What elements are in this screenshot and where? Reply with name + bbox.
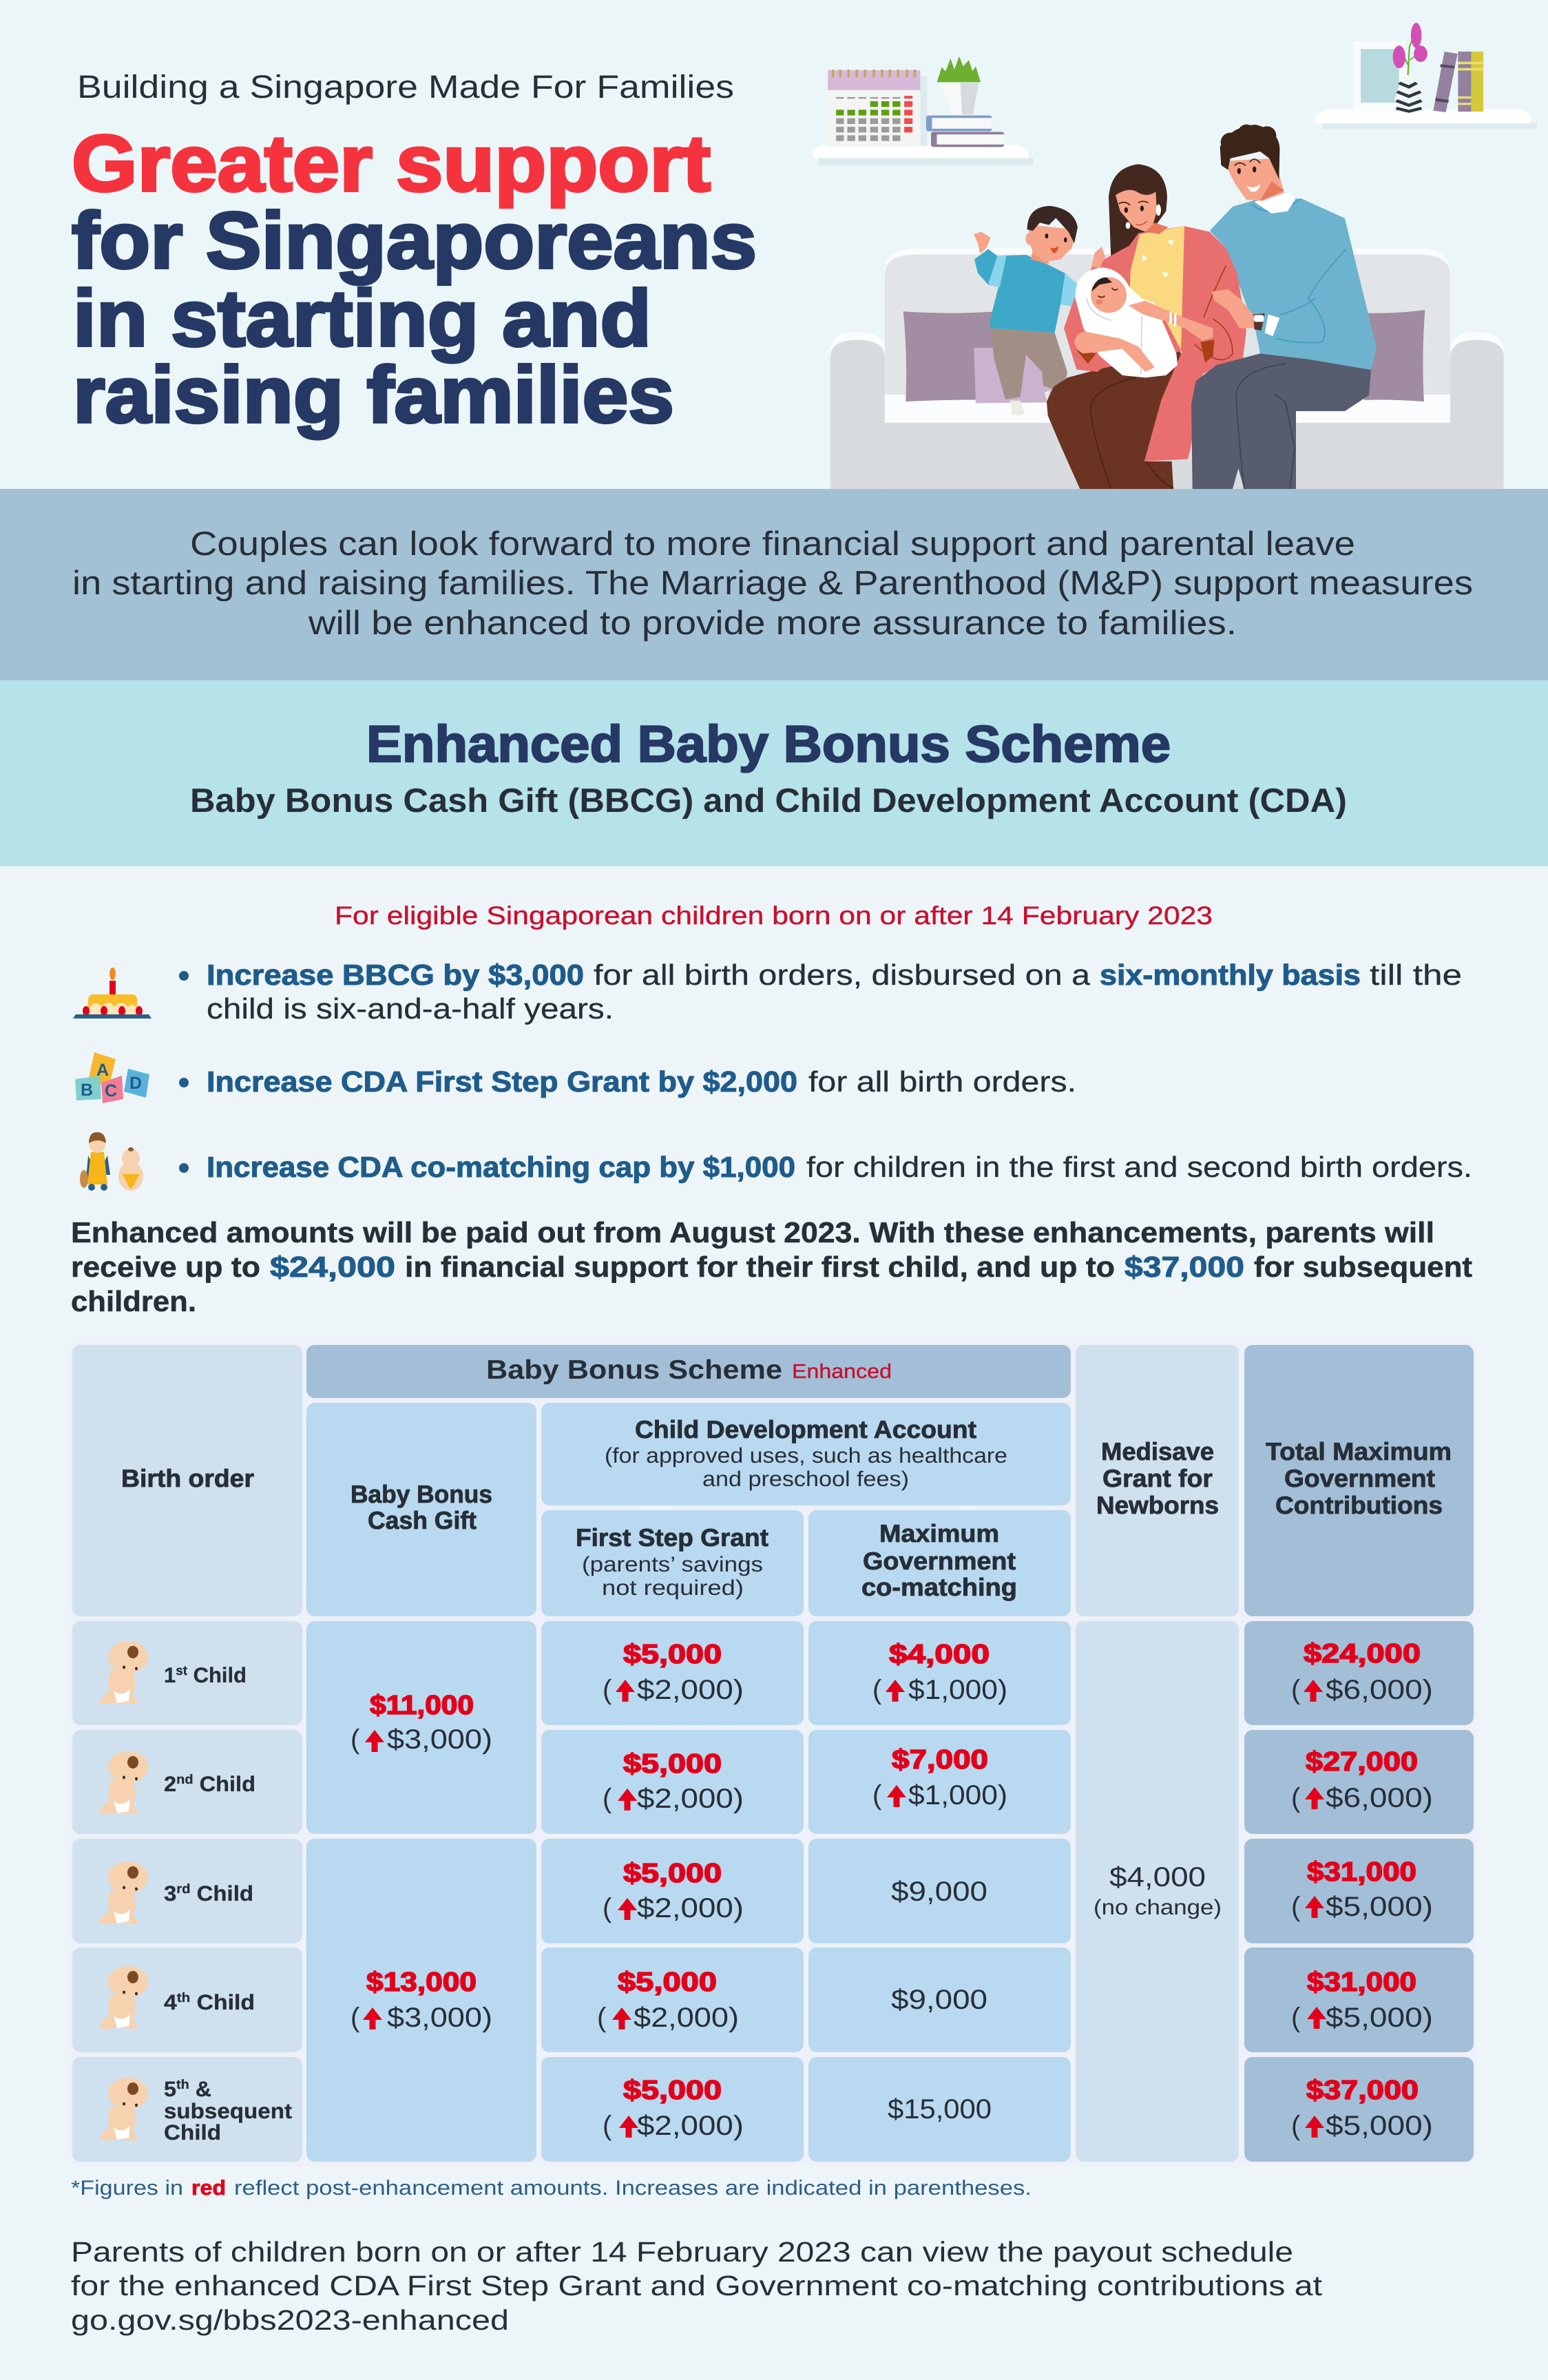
header: Medisave Grant for Newborns: Newborns xyxy=(1096,1491,1219,1519)
closing text: payout schedule: Parents of children born on or after 14 February 2023 can view the payout schedule xyxy=(71,2236,1293,2268)
icon: alphabet blocks: D xyxy=(129,1074,142,1093)
cell: total 2nd child: $6,000) xyxy=(1326,1783,1433,1813)
header: Total Maximum Government Contributions: Government xyxy=(1284,1464,1435,1492)
bullet 3: for children in the first and second birth orders. xyxy=(806,1151,1472,1183)
header: First Step Grant: not required) xyxy=(602,1576,744,1600)
bullet 2: Increase CDA First Step Grant by $2,000 xyxy=(207,1065,797,1098)
cell: Baby Bonus Cash Gift 1st and 2nd child: ( xyxy=(351,1724,360,1755)
cell: total 2nd child: ( xyxy=(1291,1783,1301,1813)
icon: father arm and legs xyxy=(1191,289,1371,489)
text block: enhanced amounts: receive up to xyxy=(71,1251,260,1283)
cell: total 5th child xyxy=(1244,2057,1474,2162)
band: intro: Couples can look forward to more financial support and parental leave xyxy=(190,525,1355,563)
cell: total 3rd child: $31,000 xyxy=(1307,1857,1416,1887)
main title: in starting and xyxy=(73,273,651,363)
cell: Baby Bonus Cash Gift 1st and 2nd child: $11,000 xyxy=(370,1691,474,1720)
cell: co-matching 2nd child: $7,000 xyxy=(892,1745,988,1775)
cell: First Step Grant 4th child xyxy=(541,1948,804,2052)
row label: 2nd Child: nd xyxy=(176,1773,193,1787)
cell: co-matching 1st child xyxy=(808,1621,1071,1725)
cell: total 1st child: $24,000 xyxy=(1304,1639,1421,1669)
cell: Baby Bonus Cash Gift 3rd to 5th child: $13,000 xyxy=(366,1967,477,1997)
cell: co-matching 5th child xyxy=(808,2057,1071,2162)
cell: total 1st child: ( xyxy=(1291,1675,1301,1705)
cell: co-matching 2nd child: ( xyxy=(872,1780,882,1810)
bullet 1: Increase BBCG by $3,000 xyxy=(207,959,584,991)
icon: birthday cake xyxy=(73,968,151,1019)
row label: 4th Child: Child xyxy=(190,1990,255,2014)
text block: enhanced amounts: children. xyxy=(71,1285,196,1317)
bullet 3: Increase CDA co-matching cap by $1,000 xyxy=(207,1151,795,1183)
closing text: payout schedule: go.gov.sg/bbs2023-enhanced xyxy=(71,2304,509,2336)
cell: First Step Grant 1st child: $5,000 xyxy=(623,1640,722,1669)
cell: First Step Grant 1st child: $2,000) xyxy=(637,1675,744,1705)
row label: 2nd Child: Child xyxy=(193,1772,255,1796)
row label: 3rd Child: Child xyxy=(191,1881,253,1906)
cell: total 1st child: $6,000) xyxy=(1326,1675,1433,1705)
row label: 5th and subsequent Child xyxy=(72,2057,302,2162)
cell: co-matching 2nd child: $1,000) xyxy=(908,1780,1007,1810)
cell: First Step Grant 4th child: ( xyxy=(597,2003,607,2033)
band: scheme heading xyxy=(0,680,1548,866)
header: First Step Grant: First Step Grant xyxy=(576,1523,768,1552)
footnote: red xyxy=(191,2177,226,2200)
text block: enhanced amounts: Enhanced amounts will be paid out from August 2023. With these enhancements, parents will xyxy=(71,1216,1434,1249)
cell: First Step Grant 5th child: $2,000) xyxy=(637,2111,744,2141)
header: Baby Bonus Scheme Enhanced: Enhanced xyxy=(792,1361,892,1383)
cell: total 4th child: ( xyxy=(1291,2003,1301,2033)
row label: 5th and subsequent Child: subsequent xyxy=(164,2099,292,2123)
header: Total Maximum Government Contributions xyxy=(1244,1345,1474,1616)
cell: co-matching 1st child: $1,000) xyxy=(908,1675,1007,1705)
row label: 5th and subsequent Child: & xyxy=(189,2077,211,2101)
header: Maximum Government co-matching: Government xyxy=(863,1547,1016,1575)
bullet 1: six-monthly basis xyxy=(1100,959,1361,991)
header: Baby Bonus Cash Gift xyxy=(306,1403,536,1616)
main title: for Singaporeans xyxy=(72,196,757,285)
cell: Medisave Grant: $4,000 xyxy=(1109,1862,1206,1892)
row label: 3rd Child: rd xyxy=(176,1882,191,1897)
row label: 2nd Child: 2 xyxy=(164,1772,176,1796)
band: intro: will be enhanced to provide more assurance to families. xyxy=(308,605,1237,642)
band: scheme heading: Enhanced Baby Bonus Scheme xyxy=(366,715,1171,773)
table: Baby Bonus Scheme xyxy=(69,1342,1477,2165)
header: Baby Bonus Scheme Enhanced: Baby Bonus Scheme xyxy=(486,1355,782,1385)
illustration: family xyxy=(974,125,1377,489)
cell: First Step Grant 4th child: $2,000) xyxy=(634,2003,739,2033)
cell: co-matching 4th child: $9,000 xyxy=(891,1985,987,2015)
icon: toddler xyxy=(974,206,1078,415)
cell: total 4th child xyxy=(1244,1948,1474,2052)
closing text: payout schedule: for the enhanced CDA First Step Grant and Government co-matching contributions at xyxy=(71,2270,1323,2301)
main title: raising families xyxy=(73,350,674,439)
icon: alphabet blocks xyxy=(75,1052,149,1103)
cell: total 4th child: $31,000 xyxy=(1307,1967,1416,1997)
text block: enhanced amounts: $37,000 xyxy=(1125,1251,1244,1283)
header: Child Development Account: (for approved uses, such as healthcare xyxy=(605,1443,1007,1468)
row label: 5th and subsequent Child: Child xyxy=(164,2120,221,2144)
icon: mother xyxy=(1047,164,1246,489)
header: Baby Bonus Cash Gift: Cash Gift xyxy=(368,1506,477,1534)
cell: Baby Bonus Cash Gift 1st and 2nd child xyxy=(306,1621,536,1834)
cell: Medisave Grant: (no change) xyxy=(1094,1895,1222,1919)
header: First Step Grant xyxy=(541,1510,804,1616)
cell: First Step Grant 3rd child xyxy=(541,1839,804,1943)
bullet 3 xyxy=(179,1151,1472,1183)
header: Maximum Government co-matching xyxy=(808,1510,1071,1616)
header: Maximum Government co-matching: Maximum xyxy=(879,1519,999,1547)
icon: sofa xyxy=(830,248,1504,489)
main title: Greater support xyxy=(72,118,711,208)
bullet 2 xyxy=(179,1065,1076,1098)
header: Child Development Account xyxy=(541,1403,1071,1505)
cell: co-matching 2nd child xyxy=(808,1730,1071,1834)
cell: First Step Grant 2nd child: $2,000) xyxy=(637,1784,744,1814)
bullet 1: child is six-and-a-half years. xyxy=(207,992,614,1025)
icon: right shelf with frame, vase and books xyxy=(1315,23,1537,129)
text block: enhanced amounts: for subsequent xyxy=(1254,1251,1472,1283)
cell: co-matching 3rd child xyxy=(808,1839,1071,1943)
cell: First Step Grant 2nd child: ( xyxy=(603,1784,612,1814)
header: Total Maximum Government Contributions: Contributions xyxy=(1275,1491,1443,1519)
cell: First Step Grant 4th child: $5,000 xyxy=(618,1967,717,1997)
cell: total 3rd child: $5,000) xyxy=(1326,1892,1433,1922)
header: Medisave Grant for Newborns xyxy=(1076,1345,1239,1616)
row label: 1st Child: Child xyxy=(187,1663,247,1687)
header: Baby Bonus Scheme Enhanced xyxy=(306,1345,1071,1398)
text block: enhanced amounts xyxy=(71,1216,1472,1317)
cell: Baby Bonus Cash Gift 1st and 2nd child: $3,000) xyxy=(387,1724,492,1755)
band: intro xyxy=(0,489,1548,680)
bullet 1: for all birth orders, disbursed on a xyxy=(594,959,1091,991)
bullet 1: till the xyxy=(1370,959,1462,991)
footnote: *Figures in xyxy=(71,2177,183,2200)
cell: Baby Bonus Cash Gift 3rd to 5th child: ( xyxy=(351,2003,360,2033)
illustration: sofa and shelves xyxy=(813,23,1537,489)
icon: father upper body xyxy=(1210,125,1377,370)
bullet 1 xyxy=(179,959,1462,1025)
cell: First Step Grant 3rd child: ( xyxy=(603,1893,612,1923)
closing text: payout schedule xyxy=(71,2236,1323,2336)
row label: 4th Child: 4 xyxy=(164,1990,176,2014)
header: Medisave Grant for Newborns: Grant for xyxy=(1102,1464,1213,1492)
cell: co-matching 1st child: $4,000 xyxy=(889,1640,990,1669)
row label: 5th and subsequent Child: th xyxy=(176,2078,189,2092)
eligibility note: For eligible Singaporean children born on or after 14 February 2023 xyxy=(335,901,1213,930)
header: First Step Grant: (parents’ savings xyxy=(582,1552,763,1576)
icon: child and baby xyxy=(80,1132,143,1191)
cell: First Step Grant 2nd child xyxy=(541,1730,804,1834)
cell: First Step Grant 3rd child: $2,000) xyxy=(637,1893,744,1923)
cell: total 1st child xyxy=(1244,1621,1474,1725)
cell: Baby Bonus Cash Gift 3rd to 5th child: $3,000) xyxy=(387,2003,492,2033)
icon: alphabet blocks: A xyxy=(96,1061,109,1080)
icon: alphabet blocks: C xyxy=(105,1081,117,1100)
cell: co-matching 4th child xyxy=(808,1948,1071,2052)
header: Medisave Grant for Newborns: Medisave xyxy=(1101,1437,1214,1465)
cell: First Step Grant 3rd child: $5,000 xyxy=(623,1859,722,1888)
hero background xyxy=(0,0,1548,489)
header: Child Development Account: and preschool fees) xyxy=(702,1467,909,1491)
cell: First Step Grant 2nd child: $5,000 xyxy=(623,1749,722,1779)
cell: total 2nd child xyxy=(1244,1730,1474,1834)
header: Baby Bonus Cash Gift: Baby Bonus xyxy=(351,1480,492,1508)
cell: total 2nd child: $27,000 xyxy=(1306,1747,1418,1777)
cell: First Step Grant 1st child xyxy=(541,1621,804,1725)
cell: Baby Bonus Cash Gift 3rd to 5th child xyxy=(306,1839,536,2162)
cell: total 3rd child: ( xyxy=(1291,1892,1301,1922)
row label: 4th Child xyxy=(72,1948,302,2052)
cell: co-matching 5th child: $15,000 xyxy=(888,2094,992,2125)
row label: 2nd Child xyxy=(72,1730,302,1834)
cell: total 4th child: $5,000) xyxy=(1326,2003,1433,2033)
text block: enhanced amounts: $24,000 xyxy=(270,1251,395,1283)
row label: 1st Child xyxy=(72,1621,302,1725)
text block: enhanced amounts: in financial support for their first child, and up to xyxy=(405,1251,1115,1283)
cell: First Step Grant 5th child xyxy=(541,2057,804,2162)
row label: 5th and subsequent Child: 5 xyxy=(164,2077,176,2101)
kicker: Building a Singapore Made For Families: Building a Singapore Made For Families xyxy=(77,68,734,105)
cell: Medisave Grant xyxy=(1076,1621,1239,2162)
cell: total 5th child: $5,000) xyxy=(1326,2111,1433,2141)
header: Child Development Account: Child Development Account xyxy=(635,1415,976,1443)
header: birth order xyxy=(72,1345,302,1616)
row label: 1st Child: 1 xyxy=(164,1663,176,1687)
header: Maximum Government co-matching: co-matching xyxy=(861,1573,1017,1601)
band: intro: in starting and raising families. The Marriage & Parenthood (M&P) support measures xyxy=(72,565,1473,602)
cell: First Step Grant 5th child: $5,000 xyxy=(623,2076,722,2105)
row label: 3rd Child xyxy=(72,1839,302,1943)
header: Total Maximum Government Contributions: Total Maximum xyxy=(1266,1437,1452,1465)
cell: co-matching 1st child: ( xyxy=(872,1675,882,1705)
cell: First Step Grant 5th child: ( xyxy=(603,2111,612,2141)
band: scheme heading: Baby Bonus Cash Gift (BBCG) and Child Development Account (CDA) xyxy=(190,782,1347,820)
cell: total 5th child: $37,000 xyxy=(1306,2076,1419,2105)
row label: 3rd Child: 3 xyxy=(164,1881,176,1906)
cell: total 3rd child xyxy=(1244,1839,1474,1943)
footnote: reflect post-enhancement amounts. Increases are indicated in parentheses. xyxy=(234,2177,1032,2200)
main title xyxy=(72,118,757,439)
icon: left shelf with calendar, plant and books xyxy=(813,56,1033,165)
row label: 4th Child: th xyxy=(177,1991,190,2005)
header: birth order: Birth order xyxy=(121,1464,254,1492)
bullet 2: for all birth orders. xyxy=(808,1065,1076,1098)
icon: swaddled newborn xyxy=(1074,267,1213,377)
row label: 1st Child: st xyxy=(176,1664,188,1678)
cell: First Step Grant 1st child: ( xyxy=(603,1675,612,1705)
icon: alphabet blocks: B xyxy=(81,1081,93,1100)
cell: total 5th child: ( xyxy=(1291,2111,1301,2141)
cell: co-matching 3rd child: $9,000 xyxy=(891,1877,987,1907)
